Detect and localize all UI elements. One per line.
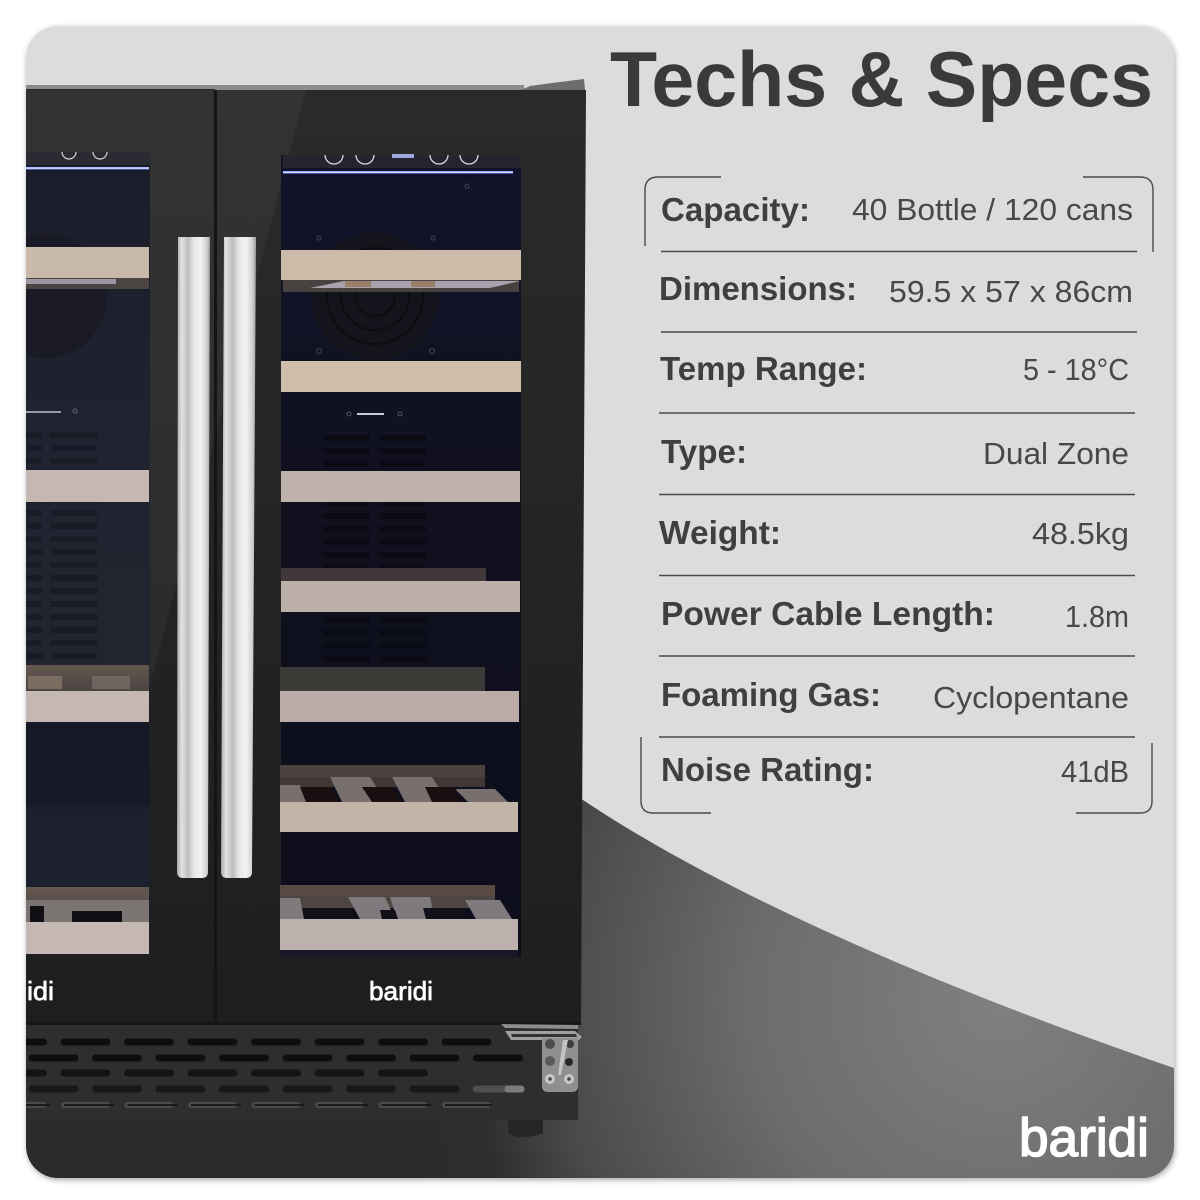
- shelf 1: [281, 250, 521, 292]
- row: capacity: Capacity:: [661, 191, 810, 228]
- left vents: [34, 432, 74, 660]
- row: noise rating: 41dB: [1061, 754, 1129, 789]
- glass reflection: [26, 90, 306, 683]
- row: noise rating: Noise Rating:: [661, 751, 874, 788]
- door logo right: baridi: [369, 976, 433, 1006]
- row: type: Dual Zone: [983, 436, 1129, 471]
- shelf 6: [280, 765, 518, 832]
- right LED strip: [283, 171, 513, 174]
- left fan: [26, 296, 107, 358]
- row: temp range: Temp Range:: [660, 350, 867, 387]
- shelf 3: [281, 471, 520, 502]
- right touch buttons: [325, 155, 478, 164]
- row: power cable length: [661, 595, 1129, 634]
- left interior display: [26, 409, 77, 413]
- right vents: [346, 435, 403, 664]
- door gap: [214, 90, 217, 1022]
- vented base grille: [0, 1022, 581, 1120]
- row: foaming gas: [661, 676, 1129, 715]
- left LED strip: [26, 167, 149, 170]
- row: capacity: 40 Bottle / 120 cans: [852, 192, 1133, 227]
- bottom hinge: [501, 1024, 582, 1092]
- door logo left: idi: [27, 976, 54, 1006]
- row: type: Type:: [661, 433, 747, 470]
- brand logo: baridi: [1019, 1108, 1149, 1168]
- bottom bracket right: [1076, 743, 1152, 813]
- left handle: [177, 237, 210, 878]
- interior display: [347, 412, 402, 416]
- row: foaming gas: Cyclopentane: [933, 680, 1129, 715]
- dark curved background wave: [26, 800, 1174, 1178]
- screws: [316, 184, 469, 354]
- right handle: [221, 237, 256, 878]
- row: weight: 48.5kg: [1032, 516, 1129, 551]
- row: dimensions: Dimensions:: [659, 270, 857, 307]
- row: noise rating: [661, 751, 1129, 789]
- row: temp range: 5 - 18°C: [1023, 352, 1129, 387]
- right fan: [311, 232, 439, 360]
- title: Techs & Specs: [610, 35, 1153, 123]
- row: dimensions: 59.5 x 57 x 86cm: [889, 274, 1133, 309]
- wine fridge product image: [0, 79, 586, 1137]
- left door window: [26, 152, 150, 955]
- shelf 5: [280, 667, 519, 722]
- top bracket right: [1083, 177, 1153, 252]
- shelf 7: [280, 885, 518, 957]
- right door window: [280, 154, 521, 957]
- row: temp range: [660, 350, 1129, 387]
- shelf 2: [281, 361, 521, 392]
- adjustable foot: [508, 1120, 543, 1137]
- row: weight: [659, 514, 1129, 551]
- top edge of cabinet: [26, 85, 524, 90]
- specification table: [641, 177, 1153, 813]
- left shelves: [26, 247, 149, 954]
- row: dimensions: [659, 270, 1133, 309]
- row: capacity: [661, 191, 1133, 228]
- right door: [217, 90, 586, 1022]
- left door: [26, 89, 215, 1022]
- row: type: [661, 433, 1129, 471]
- row: power cable length: Power Cable Length:: [661, 595, 995, 632]
- bottom bracket left: [641, 737, 711, 813]
- left touch buttons: [62, 152, 107, 159]
- top hinge: [521, 79, 585, 90]
- row: foaming gas: Foaming Gas:: [661, 676, 881, 713]
- row: weight: Weight:: [659, 514, 781, 551]
- top bracket left: [645, 177, 721, 246]
- row: power cable length: 1.8m: [1065, 599, 1129, 634]
- shelf 4: [281, 568, 520, 612]
